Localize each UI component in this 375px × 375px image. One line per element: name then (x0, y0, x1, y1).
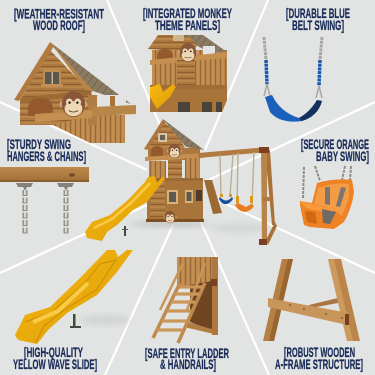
illustration: ladder (153, 257, 218, 343)
heading: swing hangers: [STURDY SWING (7, 137, 71, 152)
heading: wave slide (13, 345, 97, 372)
heading: belt swing (286, 6, 350, 33)
panel: integrated monkey theme panels (143, 6, 232, 112)
heading: a-frame (275, 345, 363, 372)
swing frame (198, 147, 277, 245)
illustration: roof close-up (14, 42, 136, 143)
illustration: beam with hangers (0, 167, 89, 235)
heading: ladder: & HANDRAILS] (160, 357, 216, 372)
central playset illustration (85, 119, 277, 245)
illustration: monkey panel tower (148, 35, 227, 112)
heading: swing hangers: HANGERS & CHAINS] (7, 149, 86, 164)
illustration: slide tip (150, 84, 176, 109)
icon: monkey face (60, 91, 88, 117)
panel: weather-resistant wood roof (14, 6, 136, 143)
panel: secure orange baby swing (300, 137, 369, 229)
panel: high-quality yellow wave slide (13, 250, 133, 372)
heading: roof (14, 6, 104, 33)
heading: wave slide: YELLOW WAVE SLIDE] (13, 357, 97, 372)
heading: baby swing (301, 137, 369, 164)
heading: monkey panels: THEME PANELS] (155, 18, 220, 33)
illustration: baby swing (300, 166, 354, 229)
swing: orange seat (235, 152, 254, 212)
heading: swing hangers (7, 137, 86, 164)
icon: monkey upper panel (167, 144, 182, 158)
heading: ladder (145, 346, 229, 372)
heading: wave slide: [HIGH-QUALITY (24, 345, 83, 360)
heading: ladder: [SAFE ENTRY LADDER (145, 346, 229, 361)
illustration: a-frame (263, 259, 360, 341)
illustration: belt swing (264, 37, 322, 122)
slide (85, 176, 165, 241)
heading: roof: [WEATHER-RESISTANT (14, 6, 104, 22)
icon: monkey lower panel (164, 211, 176, 223)
panel: safe entry ladder and handrails (145, 257, 229, 372)
panel: sturdy swing hangers and chains (0, 137, 89, 235)
tower (144, 119, 204, 223)
panel: durable blue belt swing (264, 6, 350, 122)
heading: monkey panels (143, 6, 232, 33)
heading: roof: WOOD ROOF] (33, 18, 85, 33)
heading: monkey panels: [INTEGRATED MONKEY (143, 6, 232, 21)
illustration: wave slide (15, 250, 133, 344)
icon: monkey face (178, 43, 198, 62)
panel: robust wooden a-frame structure (263, 259, 363, 372)
swing: blue belt (219, 154, 233, 204)
